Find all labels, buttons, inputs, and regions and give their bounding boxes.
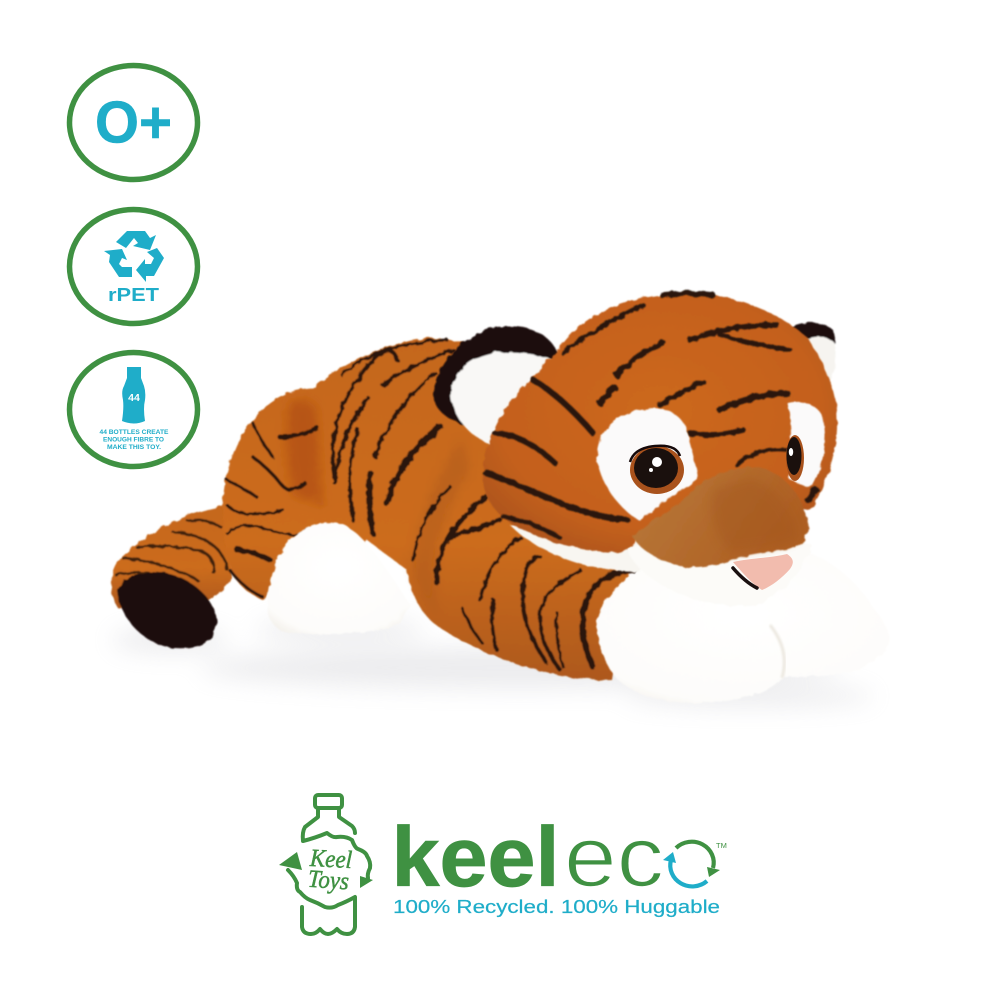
mouth line [733,568,757,588]
text block: bottles note: ENOUGH FIBRE TO [103,438,164,444]
wordmark: keel [392,810,560,904]
badge: age 0+ [70,66,198,180]
icon: bottle [122,367,145,424]
tagline: 100% Recycled. 100% Huggable [393,897,720,917]
text block: bottles note [100,430,168,451]
front shoulder shade [412,438,470,618]
icon: recycling arrows [104,231,164,282]
head [483,293,837,606]
text block: bottles note: 44 BOTTLES CREATE [100,430,168,436]
head stripes [485,294,816,538]
wordmark: TM [716,841,727,850]
bottle wordmark: Keel [308,845,353,874]
bottle wordmark: Toys [307,866,350,895]
right eye patch [788,402,825,488]
front paws [597,553,888,703]
tail black tip [117,572,217,648]
paw crease [770,625,784,678]
icon: Keel Toys bottle [279,795,373,934]
left eye [630,446,684,494]
badge: age 0+: O+ [95,90,172,156]
badge: 44 bottles: 44 [128,392,140,404]
muzzle [633,466,808,567]
rear haunch shade [287,401,324,505]
body stripes [227,340,633,670]
wordmark [392,810,727,905]
badge: rPET recycled: rPET [108,284,160,305]
right eye [786,435,804,481]
bottle wordmark [307,845,353,895]
badge: 44 bottles [70,352,198,466]
tail stripes [116,520,227,581]
floor shadow [112,619,875,706]
text block: bottles note: MAKE THIS TOY. [107,445,161,451]
right ear [788,322,837,380]
wordmark: ec [564,810,664,905]
left ear [434,326,561,445]
bottle arrows [279,852,302,870]
white chin [627,520,812,606]
rear paw [267,523,410,634]
body [223,338,633,680]
muzzle shade [712,478,798,552]
white collar under head [510,510,650,572]
left eye patch [597,408,698,521]
nose [733,554,793,590]
badge: rPET recycled [70,210,198,324]
logo: keeleco [279,795,727,934]
tail [111,506,232,648]
icon: o recycling arrows [663,842,720,886]
tiger plush [111,293,888,703]
